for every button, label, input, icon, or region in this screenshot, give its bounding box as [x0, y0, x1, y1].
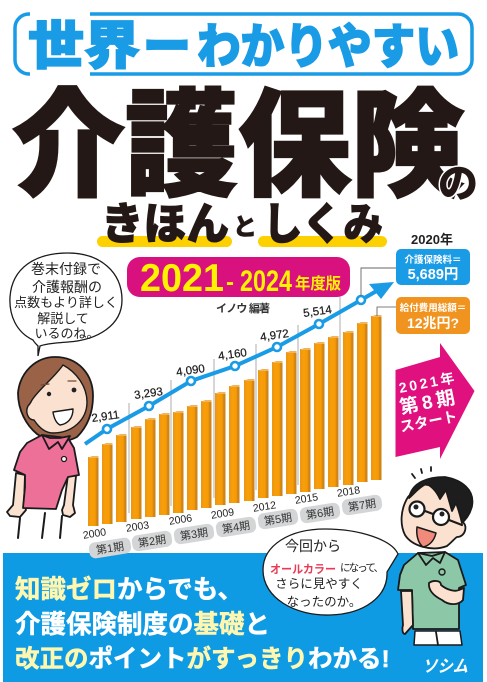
speech bubble: woman [10, 253, 122, 356]
callout: total benefit cost [377, 297, 470, 334]
period pills [88, 494, 383, 559]
title banner: 世界一わかりやすい [15, 8, 472, 78]
value labels: 2,911 [91, 409, 120, 425]
tagline: 知識ゼロからでも、 [15, 575, 243, 604]
mouth [417, 527, 436, 547]
arrow: 2021年 第8期スタート: スタート [399, 408, 459, 436]
subtitle: きほんとしくみ with yellow underlines: きほん [101, 200, 229, 249]
callout: total benefit cost: 12兆円? [407, 315, 459, 331]
tagline: 改正のポイントがすっきりわかる! [15, 644, 390, 673]
green shirt [398, 552, 466, 629]
hair [409, 477, 472, 523]
bottom blue panel [3, 553, 483, 682]
main title: 介護保険の: の [438, 162, 478, 206]
premium line with arrow [85, 282, 394, 444]
pants [414, 631, 462, 645]
vertical guide lines [129, 297, 340, 513]
callout: 2020 premium: 介護保険料＝ [404, 254, 462, 266]
character: woman in pink shirt [7, 357, 93, 538]
period pills: 第5期 [263, 510, 293, 528]
speech bubble: woman: 巻末付録で [31, 259, 101, 279]
bars: benefit cost 2000 to 2020 [88, 315, 382, 526]
year labels [82, 484, 361, 542]
speech bubble: man: になって、 [340, 560, 384, 575]
arrow: 2021年 第8期スタート [396, 343, 474, 459]
value labels [91, 304, 333, 425]
edition badge: 2021-2024年度版: 2021 [140, 257, 224, 300]
value labels: 3,293 [133, 386, 164, 402]
edition badge: 2021-2024年度版: 2024 [240, 265, 292, 298]
speech bubble: man: 今回から [285, 536, 341, 556]
speech bubble: man: さらに見やすく [275, 573, 363, 592]
period pills: 第4期 [221, 518, 251, 536]
callout: 2020 premium: 2020年 [411, 232, 453, 247]
period pills: 第3期 [179, 525, 209, 543]
legs [18, 513, 62, 538]
title banner: 世界一わかりやすい: わかりやすい [197, 21, 459, 74]
edition badge: 2021-2024年度版: - [226, 269, 234, 296]
value labels: 4,972 [259, 328, 290, 344]
year labels: 2006 [168, 512, 193, 528]
speech bubble: man [263, 529, 398, 615]
speech bubble: woman: 点数もより詳しく [14, 292, 118, 311]
year labels: 2015 [294, 491, 319, 507]
tagline: 介護保険制度の基礎と [15, 611, 270, 639]
edition badge: 2021-2024年度版: 年度版 [295, 274, 341, 293]
year labels: 2012 [252, 499, 277, 515]
pink shirt [14, 435, 79, 509]
period pills: 第2期 [137, 532, 167, 550]
glasses [410, 502, 424, 516]
speech bubble: woman: 介護報酬の [32, 277, 102, 297]
title banner: 世界一わかりやすい: ー [143, 21, 191, 74]
year labels: 2018 [336, 484, 361, 500]
chart: care insurance premium and benefit cost trend [82, 282, 394, 559]
value labels: 4,090 [175, 363, 206, 379]
year labels: 2009 [210, 506, 235, 522]
callout: 2020 premium [361, 232, 470, 296]
subtitle: きほんとしくみ with yellow underlines [97, 200, 387, 249]
collar [418, 552, 445, 565]
speech bubble: woman: 解説して [37, 308, 89, 327]
hair [18, 357, 93, 441]
year labels: 2003 [125, 519, 150, 535]
face [27, 365, 87, 433]
arm and fist [429, 581, 464, 604]
motion marks [412, 467, 431, 478]
author: イノウ 編著: イノウ 編著 [216, 301, 270, 315]
value labels: 5,514 [302, 304, 333, 320]
callout: 2020 premium: 5,689円 [408, 267, 458, 283]
arms [7, 473, 26, 517]
period pills: 第1期 [95, 539, 125, 557]
head [402, 484, 465, 548]
callout: total benefit cost: 給付費用総額＝ [400, 302, 466, 314]
title banner: 世界一わかりやすい: 世界 [28, 18, 140, 76]
arrow: 2021年 第8期スタート: 2021年 [398, 370, 456, 396]
edition badge: 2021-2024年度版 [127, 257, 350, 300]
period pills: 第7期 [347, 496, 377, 514]
arrow: 2021年 第8期スタート: 第8期 [398, 387, 457, 419]
tagline [15, 575, 390, 673]
period pills: 第6期 [305, 504, 335, 522]
main title: 介護保険の: 介護保険 [12, 81, 464, 211]
subtitle: きほんとしくみ with yellow underlines: と [233, 214, 257, 241]
speech bubble: man: オールカラー [270, 563, 336, 576]
collar [42, 435, 70, 449]
subtitle: きほんとしくみ with yellow underlines: しくみ [263, 200, 383, 249]
character: man with glasses in green shirt [398, 467, 472, 645]
speech bubble: woman: いるのね。 [34, 323, 100, 342]
value labels: 4,160 [217, 347, 248, 363]
publisher logo: ソシム: ソシム [421, 656, 472, 676]
year labels: 2000 [82, 526, 107, 542]
speech bubble: man: なったのか。 [287, 591, 361, 610]
